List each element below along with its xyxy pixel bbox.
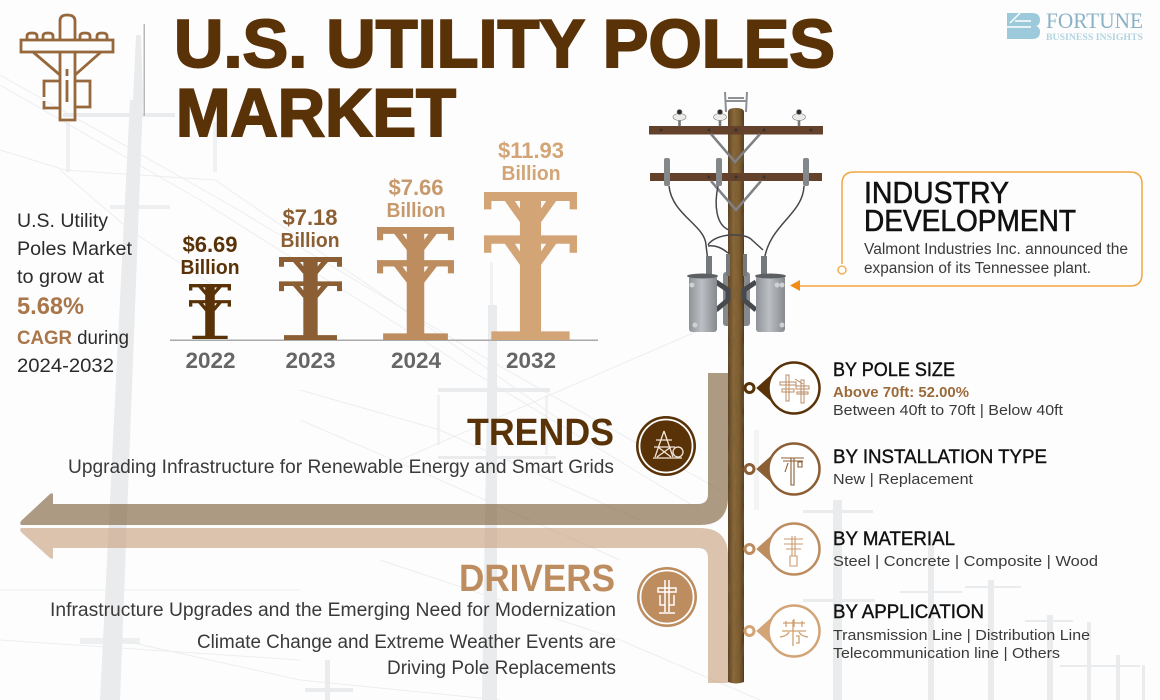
divider <box>144 24 145 116</box>
wires <box>669 186 804 262</box>
options: Steel | Concrete | Composite | Wood <box>833 553 1098 570</box>
bar 2023: 2023 <box>285 348 336 373</box>
text: drivers description <box>50 600 616 679</box>
callout heading: INDUSTRY <box>864 175 1009 210</box>
bar 2022: Billion <box>180 256 240 279</box>
cutout switches <box>664 158 809 186</box>
bar 2023 <box>279 205 342 373</box>
illustration: main utility pole with transformers <box>649 92 823 684</box>
options: Between 40ft to 70ft | Below 40ft <box>833 402 1064 419</box>
crossarms <box>649 126 823 134</box>
pole trunk <box>728 108 744 684</box>
bar 2022: 2022 <box>185 348 236 373</box>
pin <box>745 606 820 656</box>
text: drivers description: Driving Pole Replacements <box>387 658 616 679</box>
segment: by pole size <box>745 359 1064 419</box>
heading: BY POLE SIZE <box>833 359 955 381</box>
logo: Fortune Business Insights <box>1007 8 1143 43</box>
pin <box>745 444 820 494</box>
text block: CAGR summary: to grow at <box>17 266 105 288</box>
icon: transmission pole <box>780 619 808 646</box>
bar chart: market size poles <box>170 138 598 373</box>
icon: pole with transformer <box>784 536 803 566</box>
share: Above 70ft: 52.00% <box>833 384 969 401</box>
bar 2032: $11.93 <box>498 138 564 163</box>
options: New | Replacement <box>833 471 974 488</box>
callout border with arrow <box>796 172 1142 286</box>
bar 2024 <box>377 175 454 373</box>
center transformer <box>723 272 750 326</box>
arrow: drivers band <box>20 528 728 683</box>
icon: trends <box>636 416 696 476</box>
options: Transmission Line | Distribution Line <box>833 627 1090 644</box>
callout: industry development: DEVELOPMENT <box>864 203 1076 238</box>
bar 2032: Billion <box>502 162 560 185</box>
text block: CAGR summary: CAGR during <box>17 327 129 349</box>
logo: Fortune Business Insights: BUSINESS INSIGHTS <box>1046 33 1143 43</box>
mounting brackets <box>716 282 756 310</box>
icon: two poles <box>780 375 809 403</box>
icon: utility pole logo <box>21 15 113 120</box>
text: trends description: Upgrading Infrastructure for Renewable Energy and Smart Grids <box>68 457 614 478</box>
heading: BY MATERIAL <box>833 528 955 550</box>
heading: trends: TRENDS <box>467 412 614 454</box>
text block: CAGR summary <box>17 210 133 377</box>
left transformer <box>687 274 718 332</box>
braces <box>711 134 761 210</box>
bar 2032: 2032 <box>506 348 556 373</box>
bar 2024: $7.66 <box>388 175 444 200</box>
arrow: trends band <box>20 373 728 525</box>
top bracket <box>725 92 747 112</box>
text block: CAGR summary: Poles Market <box>17 238 133 260</box>
chart baseline <box>170 340 598 341</box>
logo: Fortune Business Insights: FORTUNE <box>1046 8 1143 33</box>
callout body: Valmont Industries Inc. announced the <box>864 241 1128 258</box>
heading: drivers: DRIVERS <box>459 558 615 600</box>
pin <box>745 524 820 574</box>
bar 2022: $6.69 <box>182 232 238 257</box>
bar 2032 <box>484 138 577 373</box>
text block: CAGR summary: 5.68% <box>17 293 84 320</box>
icon: drivers <box>637 567 697 627</box>
title <box>174 6 835 151</box>
icon: pole with worker <box>781 458 804 485</box>
callout: industry development <box>790 172 1142 291</box>
pin <box>745 362 820 414</box>
bar 2024: 2024 <box>391 348 442 373</box>
segment: by application <box>745 601 1090 662</box>
transformer bushings <box>706 254 767 276</box>
heading: BY INSTALLATION TYPE <box>833 446 1047 468</box>
bar 2023: $7.18 <box>282 205 338 230</box>
segment: by material <box>745 524 1098 574</box>
callout: industry development: expansion of its Tennessee plant. <box>864 260 1091 277</box>
segment: by application: Telecommunication line | Others <box>833 645 1060 662</box>
title: MARKET <box>176 75 456 151</box>
insulators <box>673 110 806 126</box>
segment: by installation type <box>745 444 1047 494</box>
bar 2022 <box>180 232 240 373</box>
text: drivers description: Climate Change and Extreme Weather Events are <box>197 632 616 653</box>
bar 2023: Billion <box>280 229 340 252</box>
text block: CAGR summary: U.S. Utility <box>17 210 108 232</box>
text block: CAGR summary: 2024-2032 <box>17 355 114 377</box>
heading: BY APPLICATION <box>833 601 984 623</box>
title: U.S. UTILITY POLES <box>174 6 835 82</box>
crossarm bolts <box>660 128 812 178</box>
bar 2024: Billion <box>386 199 446 222</box>
right transformer <box>755 274 786 332</box>
text: drivers description: Infrastructure Upgrades and the Emerging Need for Modernization <box>50 600 616 621</box>
